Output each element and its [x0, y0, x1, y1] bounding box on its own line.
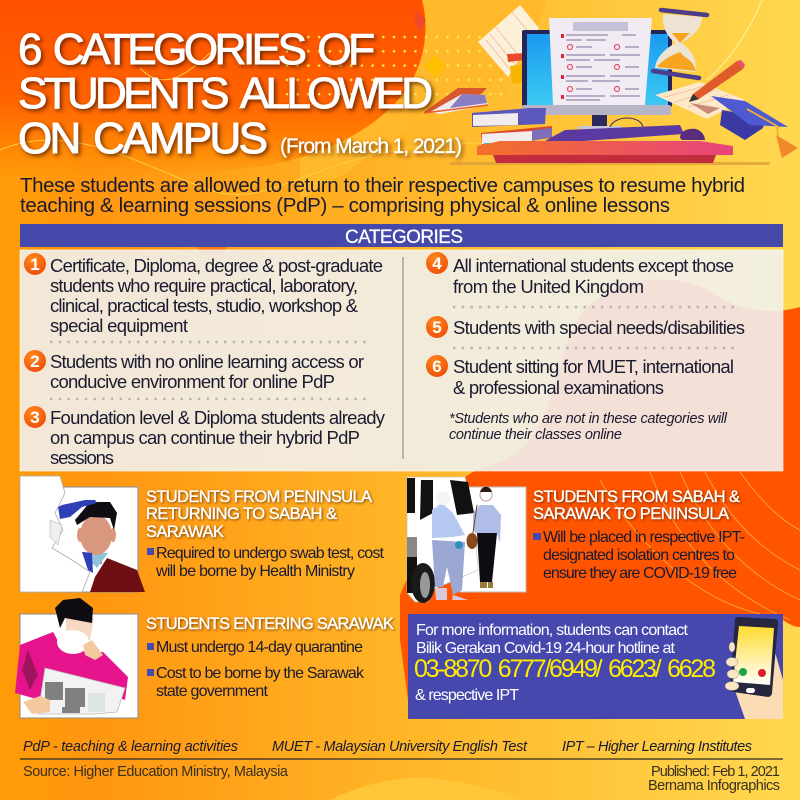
title: ON CAMPUS	[18, 114, 268, 163]
category 4: All international students except those	[453, 255, 734, 276]
icon: hourglass	[653, 10, 707, 78]
category 2: 2	[30, 352, 40, 371]
glossary: MUET - Malaysian University English Test	[272, 739, 528, 755]
icon: graduation cap	[711, 96, 798, 158]
illustration: student reading	[15, 598, 138, 718]
icon: bookmark tabs	[507, 53, 526, 84]
category 1: students who require practical, laboratory,	[50, 275, 358, 296]
panel: hotline: Bilik Gerakan Covid-19 24-hour hotline at	[416, 640, 676, 657]
illustration: health worker and student	[407, 477, 526, 603]
glossary	[23, 739, 752, 755]
heading	[533, 488, 740, 523]
heading: SARAWAK TO PENINSULA	[533, 505, 729, 523]
panel: hotline: & respective IPT	[415, 687, 519, 704]
bullet text	[147, 639, 365, 700]
bullet text: Required to undergo swab test, cost	[156, 545, 385, 562]
category 2	[24, 350, 364, 392]
bullet text	[147, 545, 385, 580]
category 5: 5	[432, 318, 442, 337]
heading: RETURNING TO SABAH &	[146, 505, 337, 523]
illustration: exam on computer desk	[424, 5, 798, 165]
icon: desk	[450, 141, 770, 165]
icon: monitor	[522, 30, 672, 129]
category 4: from the United Kingdom	[453, 276, 644, 297]
icon: phone in hand	[725, 617, 783, 719]
icon: right note paper	[655, 82, 745, 119]
category 4	[426, 252, 734, 297]
bullet text: will be borne by Health Ministry	[155, 563, 355, 580]
heading: STUDENTS FROM PENINSULA	[146, 488, 372, 506]
bullet text: state government	[156, 683, 269, 700]
category 6: & professional examinations	[453, 377, 664, 398]
panel: hotline: For more information, students can contact	[416, 622, 689, 639]
icon: book stack	[424, 88, 552, 152]
heading: categories: CATEGORIES	[345, 227, 463, 248]
intro text: These students are allowed to return to their respective campuses to resume hybrid	[20, 174, 745, 197]
credit: Bernama Infographics	[648, 778, 780, 794]
illustration: swab test	[20, 476, 145, 592]
icon: left note paper	[478, 5, 539, 77]
title: (From March 1, 2021)	[280, 135, 462, 158]
hotline number: 03-8870 6777/6949/ 6623/ 6628	[414, 655, 716, 683]
category 1	[24, 253, 383, 336]
category 4: 4	[432, 254, 442, 273]
category 3: sessions	[50, 447, 114, 468]
heading: SARAWAK	[146, 523, 224, 541]
heading: categories	[20, 224, 783, 248]
panel: students from sabah and sarawak	[407, 477, 745, 603]
bullet text: ensure they are COVID-19 free	[543, 565, 737, 582]
icon: keyboard and mouse	[540, 118, 705, 144]
icon: test paper	[549, 18, 652, 105]
bullet text: designated isolation centres to	[543, 547, 735, 564]
category 6	[426, 355, 734, 398]
category 3: 3	[30, 408, 40, 427]
heading: STUDENTS ENTERING SARAWAK	[146, 615, 394, 633]
heading: STUDENTS FROM SABAH &	[533, 488, 740, 506]
source: Source: Higher Education Ministry, Malaysia	[23, 764, 289, 780]
category 3: on campus can continue their hybrid PdP	[50, 427, 360, 448]
note: continue their classes online	[449, 427, 622, 443]
credit	[648, 764, 780, 794]
heading	[146, 488, 372, 541]
bullet text: Must undergo 14-day quarantine	[156, 639, 363, 656]
title: STUDENTS ALLOWED	[18, 69, 433, 118]
category 3: Foundation level & Diploma students already	[50, 407, 386, 428]
category 5: Students with special needs/disabilities	[453, 317, 745, 338]
category 2: Students with no online learning access or	[50, 351, 364, 372]
category 1: clinical, practical tests, studio, workshop &	[50, 295, 359, 316]
bullet text: Will be placed in respective IPT-	[543, 529, 745, 546]
title: 6 CATEGORIES OF	[18, 25, 375, 74]
panel: categories	[20, 224, 783, 471]
category 1: 1	[30, 255, 40, 274]
glossary: PdP - teaching & learning activities	[23, 739, 238, 755]
icon: pencil	[689, 60, 745, 102]
note: *Students who are not in these categories will	[449, 411, 728, 427]
category 1: Certificate, Diploma, degree & post-graduate	[50, 255, 383, 276]
title	[18, 25, 462, 163]
category 6: Student sitting for MUET, international	[453, 356, 734, 377]
intro text	[20, 174, 745, 217]
category 2: conducive environment for online PdP	[50, 371, 335, 392]
bullet text	[533, 529, 745, 582]
bullet text: Cost to be borne by the Sarawak	[156, 665, 365, 682]
panel: students from peninsula	[20, 476, 385, 592]
glossary: IPT – Higher Learning Institutes	[562, 739, 752, 755]
category 6: 6	[432, 357, 442, 376]
panel: students entering sarawak	[15, 598, 394, 718]
category 1: special equipment	[50, 315, 188, 336]
intro text: teaching & learning sessions (PdP) – comprising physical & online lessons	[20, 194, 670, 217]
category 3	[24, 406, 386, 468]
credit: Published: Feb 1, 2021	[651, 764, 780, 780]
note	[449, 411, 728, 443]
panel: hotline	[408, 614, 783, 719]
